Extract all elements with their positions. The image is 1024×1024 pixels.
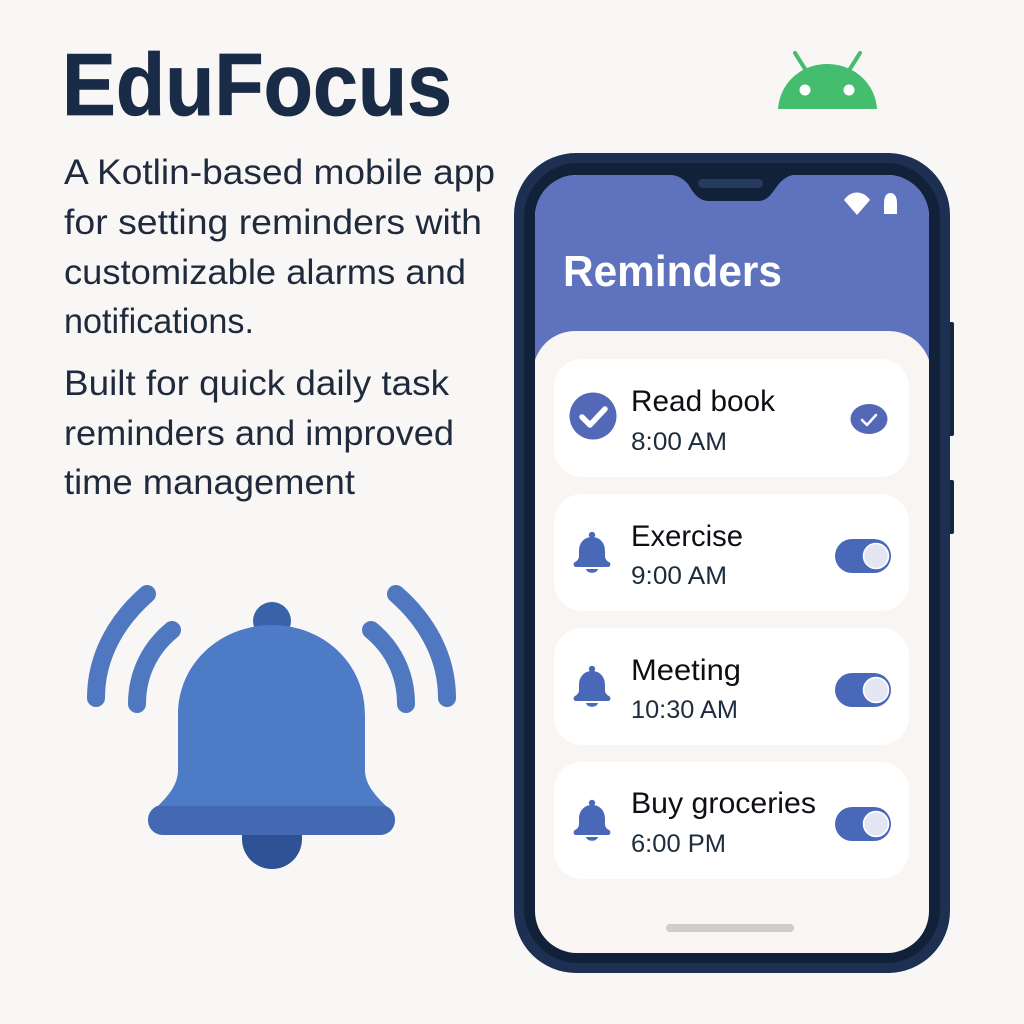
icon: android logo: [778, 53, 877, 109]
card: exercise: [554, 494, 909, 611]
card: buy groceries: [554, 762, 909, 879]
notch: [672, 175, 793, 201]
card: read book: Read book: [631, 385, 776, 418]
icon: wifi: [844, 192, 870, 215]
card: meeting: [554, 628, 909, 745]
side buttons: [948, 322, 954, 534]
text block: purpose: Built for quick daily task: [64, 364, 450, 403]
card: buy groceries: Buy groceries: [631, 787, 816, 820]
text block: app description: A Kotlin-based mobile app: [64, 153, 495, 192]
text block: purpose: time management: [64, 463, 355, 502]
phone: [514, 153, 954, 973]
speaker: [698, 179, 763, 188]
text block: app description: [64, 153, 495, 341]
card: exercise: 9:00 AM: [631, 562, 727, 590]
card: buy groceries: 6:00 PM: [631, 830, 726, 858]
icon: ringing bell: [96, 594, 447, 869]
screen title: Reminders: [563, 247, 782, 296]
app header: [535, 175, 929, 362]
text block: app description: for setting reminders with: [64, 203, 482, 242]
text block: purpose: [64, 364, 454, 502]
card: meeting: Meeting: [631, 654, 741, 687]
home indicator: [666, 924, 794, 932]
card: read book: [554, 359, 909, 477]
title: EduFocus: [62, 35, 452, 134]
text block: app description: customizable alarms and: [64, 253, 466, 292]
text block: purpose: reminders and improved: [64, 414, 454, 453]
card: read book: 8:00 AM: [631, 428, 727, 456]
phone frame: [514, 153, 950, 973]
card: meeting: 10:30 AM: [631, 696, 738, 724]
icon: battery: [884, 193, 897, 214]
phone screen: [535, 175, 929, 953]
text block: app description: notifications.: [64, 302, 254, 341]
card: exercise: Exercise: [631, 520, 743, 553]
content sheet: [535, 331, 929, 420]
